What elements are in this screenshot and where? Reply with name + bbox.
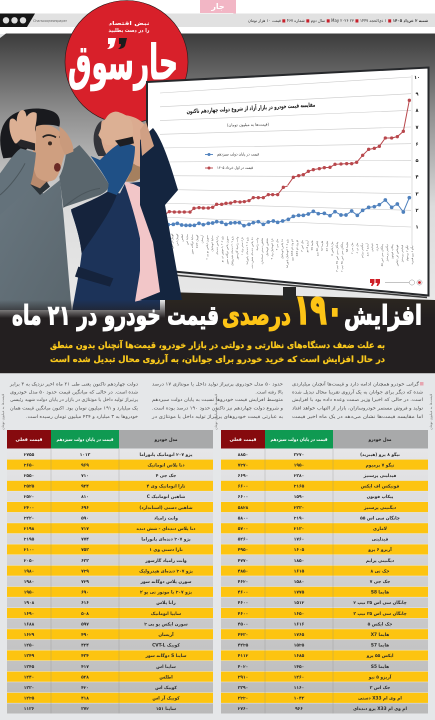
x axis car labels: جک جی ۴ [275, 238, 279, 250]
left table rows: جک جی ۴ [156, 473, 176, 479]
x axis car labels: کوییک اس [175, 233, 179, 246]
right table rows: ۲۳۸۰ [294, 474, 304, 479]
side caption middle: قیمت‌ها به میلیون تومان [214, 394, 218, 430]
article column 2 [151, 382, 284, 420]
x axis car labels: فیدلیتی [370, 243, 374, 252]
left table rows: ۷۷۴ [81, 538, 89, 543]
x axis car labels: دنا پلاس اتوماتیک [280, 238, 284, 259]
x axis car labels: ام وی ام X33 [295, 239, 300, 256]
monitor corner icons [370, 279, 422, 286]
x axis car labels: سورن پلاس دوگانه سوز [225, 236, 229, 265]
right table rows: ۱۶۱۶ [294, 622, 305, 627]
left table rows: ۴۱۷ [81, 665, 89, 670]
right table rows: ۲۱۶۵ [294, 485, 305, 490]
left table rows: ۷۱۰ [81, 474, 89, 479]
top pink tag [200, 0, 236, 15]
bench under monitor [165, 292, 435, 320]
left table rows: وانت زامیاد گازسوز [144, 558, 187, 564]
left table rows: ۲۱۹۵ [24, 538, 35, 543]
right table rows: ۱۶۵۰ [294, 612, 304, 617]
right table rows: ۱۰۴۳ [294, 697, 305, 702]
right table rows: ۵۷۰۰ [238, 527, 248, 532]
x axis car labels: هایما S8 [345, 242, 349, 252]
left table rows: ۲۰۵۰ [24, 559, 34, 564]
right table rows: ۳۲۷۰ [294, 453, 304, 458]
left table rows: ۱۰۱۳ [80, 453, 91, 458]
x axis car labels: دنا پلاس دنده‌ای شش دنده [250, 237, 254, 268]
left table rows: ۲۴۰۰ [24, 506, 34, 511]
left table rows: ساینا S دوگانه سوز [144, 653, 187, 659]
left table rows: ۷۲۹ [81, 569, 89, 574]
subheadline: در حال افزایش است که خرید خودرو برای جوانان، به آرزوی محال تبدیل شده است [50, 353, 386, 365]
left table rows: ۶۱۶ [81, 601, 89, 606]
right table rows: ۵۸۲۸ [238, 506, 249, 511]
article column 3: دولت چهاردهم تاکنون یعنی طی ۲۱ ماه اخیر نزدیک به ۳ برابر [9, 382, 138, 388]
left table rows: ۴۳۴ [81, 654, 89, 659]
right table rows: دیگنیتی پرستیژ [363, 505, 397, 511]
chart title: مقایسه قیمت خودرو در بازار آزاد از شروع دولت چهاردهم تاکنون [186, 101, 316, 115]
left table rows: آریسان [158, 632, 174, 638]
right table rows: ۹۶۶ [295, 707, 303, 712]
right table rows: ۱۵۸۰ [294, 580, 304, 585]
right table rows: ایکس ۵۵ پرو [366, 653, 394, 659]
x axis car labels: فونیکس اف ایکس [395, 244, 399, 266]
x axis car labels: لاماری [375, 243, 379, 251]
right table rows: ۶۶۰۰ [238, 485, 248, 490]
right table rows: ام وی ام X33 پرو دنده‌ای [353, 706, 407, 712]
left table rows: دنا پلاس اتوماتیک [147, 462, 185, 468]
date bar [0, 14, 435, 27]
left table rows: شاهین اتوماتیک C [147, 494, 185, 500]
left table rows: ۴۳۴ [81, 644, 89, 649]
left table rows [7, 449, 213, 714]
x axis car labels: جک ایکس ۵ [330, 241, 334, 256]
x axis car labels: وانت زامیاد گازسوز [235, 236, 239, 260]
y axis labels [414, 75, 420, 230]
logo wordmark: چارسوق [68, 35, 178, 91]
left table rows: ۵۳۸ [81, 675, 89, 680]
x axis car labels: آریسان [200, 235, 204, 243]
left table rows: ۷۱۷ [81, 527, 89, 532]
social badge [0, 14, 35, 27]
right table rows: ۴۸۵۰ [238, 569, 248, 574]
x axis car labels: سایپا اتوماتیک [210, 235, 214, 252]
right table rows: پیکاپ فوتون [367, 494, 394, 500]
y axis labels: ۱۰ [414, 75, 420, 81]
x axis car labels: رانا پلاس دنده‌ای [215, 235, 219, 255]
x axis car labels: شاهین دستی استاندارد [260, 237, 264, 265]
x axis car labels: هایما S7 [320, 240, 324, 251]
x axis car labels: پژو ۲۰۷ دنده‌ای هیدرولیک [230, 236, 234, 266]
x axis car labels: جک اس ۳ [300, 240, 304, 252]
x axis car labels: سورن ایکس یو پی ۲ [205, 235, 209, 259]
y axis labels: ۳ [415, 192, 419, 198]
article column 3: یک میلیارد و ۱۹۱ میلیون تومان بود. اکنون میانگین قیمت همان [10, 404, 139, 412]
left table header: مدل خودرو [154, 437, 178, 443]
article column 3 [9, 382, 139, 420]
left table rows: پژو ۲۰۷ اتوماتیک پانوراما [140, 452, 193, 458]
right table rows: ۷۲۷۰ [238, 463, 248, 468]
right table header: قیمت فعلی [230, 437, 256, 443]
y axis labels: ۴ [415, 174, 419, 180]
x axis car labels: چانگان سی اس ۳۵ تیپ ۲ [340, 242, 344, 272]
right table rows: ۴۵۰۰ [238, 622, 248, 627]
right table rows: ۵۳۶۰ [238, 538, 248, 543]
article column 1: گرانی خودرو همچنان ادامه دارد و قیمت‌ها آنچنان میلیاردی [292, 380, 420, 388]
left table rows: ۱۹۵۰ [24, 591, 34, 596]
left table rows: ۵۹۰ [81, 516, 89, 521]
left table rows: ۱۶۸۸ [24, 622, 35, 627]
right table rows: فیدلیتی پرستیژ [363, 474, 397, 479]
right table header [221, 430, 428, 448]
left table header [7, 430, 213, 448]
right table rows: ۳۹۱۰ [238, 675, 248, 680]
right table rows: ۴۹۵۰ [238, 548, 248, 553]
red line series [160, 100, 409, 214]
left table rows: سورن پلاس دوگانه سوز [140, 579, 191, 585]
right table rows: ۱۱۶۰ [294, 686, 304, 691]
right table rows: ۴۶۰۰ [238, 591, 248, 596]
x axis car labels: جک جی ۷ [350, 242, 354, 254]
left table rows: ۲۳۳۰ [24, 516, 34, 521]
article column 2: متوسط افزایش قیمت خودروها نسبت به پایان دولت سیزدهم [152, 398, 284, 403]
left table rows: ۱۳۵۰ [24, 644, 34, 649]
y axis labels: ۸ [415, 108, 419, 114]
x axis car labels: کوییک آر اس [170, 233, 174, 248]
article column 2: به عبارتی قیمت خودروهای پرتیراژ تولید داخل یا مونتاژی در [151, 415, 283, 420]
right table rows: ۱۷۶۰ [294, 538, 304, 543]
right table rows: فیدلیتی [372, 538, 388, 543]
right table rows: ام وی ام X33 دستی [358, 696, 402, 702]
right table rows: ۱۷۷۵ [294, 591, 305, 596]
headline: قیمت خودرو در ۲۱ ماه [12, 300, 219, 332]
table: left [7, 430, 213, 714]
right table rows: ۴۶۲۰ [238, 580, 248, 585]
x axis car labels: شاهین اتوماتیک [265, 238, 269, 256]
chart subtitle: (قیمت‌ها به میلیون تومان) [227, 122, 269, 127]
side caption right: قیمت‌ها به میلیون تومان [429, 394, 433, 430]
right table rows: ۱۶۸۵ [294, 654, 305, 659]
right table rows: ۴۳۲۵ [238, 644, 249, 649]
x axis car labels: دیگنیتی پرایم [360, 242, 364, 258]
left table rows: ۵۹۷ [81, 622, 89, 627]
x axis car labels: کوییک CVT [195, 234, 199, 248]
x axis car labels: چانگان سی اس ۳۵ تیپ ۳ [335, 241, 339, 272]
right table rows: ۸۸۵۰ [238, 453, 248, 458]
social handle: Charsooqnewspaper [33, 18, 67, 23]
right table rows: ۶۶۹۰ [238, 474, 248, 479]
left table header: قیمت فعلی [16, 437, 42, 443]
left table rows: ۱۹۰۸ [24, 601, 35, 606]
right table rows: ۱۵۹۰ [294, 495, 304, 500]
left table rows: ۹۶۹ [81, 463, 89, 468]
left table rows: ۶۹۰ [81, 591, 89, 596]
x axis car labels: آریزو ۶ پرو [365, 243, 369, 257]
blue line series [163, 198, 409, 226]
x axis car labels: ساینا ۱۵۱ [165, 232, 169, 244]
right table rows: تیگو ۸ پرو (هیبرید) [360, 452, 400, 458]
right table rows: ۱۸۵۰ [294, 559, 304, 564]
right table header: مدل خودرو [368, 437, 392, 443]
side caption left: قیمت‌ها به میلیون تومان [1, 394, 5, 430]
table: right [221, 430, 428, 714]
left table rows: ۸۱۰ [81, 495, 89, 500]
right table rows: ۲۱۹۰ [294, 516, 304, 521]
x axis car labels: ایکس ۵۵ پرو [315, 240, 319, 257]
right table rows: هایما X7 [371, 632, 389, 638]
y axis labels: ۶ [415, 142, 419, 148]
right table rows: چانگان سی اس ۳۵ تیپ ۲ [353, 600, 407, 606]
right table rows: ۱۷۶۵ [294, 633, 305, 638]
right table rows: ۴۱۱۲ [238, 654, 249, 659]
x axis car labels: تیگو ۷ پرمیوم [405, 245, 410, 261]
right table rows: فونیکس اف ایکس [361, 484, 399, 490]
left table rows: ۱۳۴۹ [24, 654, 35, 659]
logo quote marks [107, 38, 127, 49]
left table rows: ۱۳۴۵ [24, 665, 35, 670]
x axis car labels: اطلس [180, 234, 184, 242]
left table rows: سورن ایکس یو پی ۲ [144, 621, 188, 627]
right table rows: آریزو ۶ پرو [367, 547, 392, 553]
left table rows: ساینا اس [156, 665, 176, 670]
left table rows: ۱۹۸۰ [24, 569, 34, 574]
left table header: قیمت در پایان دولت سیزدهم [56, 437, 114, 443]
right table rows: هایما S7 [371, 643, 389, 649]
article column 2: بالا رفته است. [255, 390, 283, 396]
left table rows: ۲۵۵۰ [24, 474, 34, 479]
left table rows: ۲۵۲۰ [24, 495, 34, 500]
right table rows: تیگو ۷ پرمیوم [366, 462, 395, 468]
left table rows: ۵۰۸ [81, 612, 89, 617]
right table rows: هایما S5 [371, 664, 389, 670]
left table rows: ۱۹۸۰ [24, 580, 34, 585]
y axis labels: ۲ [415, 208, 419, 214]
right table rows: ۱۵۲۵ [294, 644, 305, 649]
x axis car labels: پژو ۲۰۷ دنده‌ای پانوراما [245, 237, 249, 264]
monitor with chart [147, 68, 428, 300]
left table rows: وانت زامیاد [154, 516, 178, 521]
x axis car labels: چانگان سی اس ۵۵ [380, 244, 384, 266]
right table rows: لاماری [373, 527, 387, 532]
left table rows: ۲۶۵۰ [24, 463, 34, 468]
x axis car labels: تارا دستی وی ۱ [240, 237, 244, 255]
left table rows: ۶۹۶ [81, 506, 89, 511]
right table rows: ۴۴۳۰ [238, 633, 248, 638]
headline: درصدی [222, 300, 291, 332]
photo: man in navy jacket [71, 112, 182, 310]
subheadline [50, 339, 386, 365]
legend [205, 152, 259, 170]
legend: قیمت در اول خرداد ۱۴۰۵ [217, 165, 253, 170]
left table rows: ۲۱۰۰ [24, 548, 34, 553]
y axis labels: ۵ [415, 158, 419, 164]
y axis labels: ۷ [415, 125, 419, 131]
right table header: قیمت در پایان دولت سیزدهم [270, 437, 328, 443]
right table rows: جک تی ۸ [370, 568, 390, 574]
x axis car labels: پژو ۲۰۷ اتوماتیک پانوراما [285, 239, 289, 268]
left table rows: ۴۹۰ [81, 633, 89, 638]
date line: شنبه ۲ خرداد ۱۴۰۵ ■ ۱ ذی‌الحجه ۱۴۴۷ ■ ۲۳ May ۲۰۲۶ ■ سال دوم ■ شماره ۴۶۷ ■ قیمت ۱۰ هزار تومان [248, 18, 428, 23]
x axis car labels: دیگنیتی پرستیژ [385, 243, 389, 262]
top pink tag: جار [210, 2, 225, 11]
right table rows [221, 449, 428, 714]
article column 2: و شروع دولت چهاردهم نیز تاکنون حدود ۱۹۰ درصد بوده است. [152, 406, 283, 412]
x axis car labels: آریزو ۵ نیو [305, 240, 309, 253]
masthead logo circle [65, 0, 188, 124]
left table rows: ۱۳۳۰ [24, 686, 34, 691]
article column 3: خودروها به ۳ میلیارد و ۴۲۴ میلیون تومان رسیده است. [26, 414, 138, 420]
right table rows: جک جی ۷ [370, 579, 390, 585]
right table rows: ۱۶۱۵ [294, 569, 305, 574]
headline: ۱۹۰ [294, 285, 343, 334]
left table rows: کوییک CVT-L [152, 643, 180, 649]
right table rows: ۲۷۶۰ [238, 707, 248, 712]
right table rows: جک ایکس ۵ [368, 621, 392, 627]
left table rows: ساینا ۱۵۱ [156, 707, 176, 712]
tagline: نبض اقتصاد [108, 21, 150, 27]
headline band [0, 285, 435, 374]
right table rows: ۱۹۵۰ [294, 463, 304, 468]
monitor frame [147, 68, 428, 296]
x axis car labels: جک تی ۸ [355, 242, 359, 253]
photo: man in gray shirt [0, 109, 109, 310]
right table rows: آریزو ۵ نیو [368, 674, 392, 680]
right table rows: ۴۶۰۰ [238, 601, 248, 606]
masthead logo circle: را در دست بطلبید [108, 28, 150, 34]
left table rows: پژو ۲۰۷ با موتور تی یو ۳ [140, 591, 192, 596]
left table rows: ۲۱۹۸ [24, 527, 35, 532]
subheadline: به علت ضعف دستگاه‌های نظارتی و دولتی در بازار خودرو، قیمت‌ها آنچنان بدون منطق [50, 339, 385, 351]
left table rows: ۱۱۳۶ [24, 707, 35, 712]
left table rows: پژو ۲۰۷ دنده‌ای پانوراما [141, 538, 191, 543]
left table rows: ۷۵۳ [81, 548, 89, 553]
right table rows: ۱۵۱۲ [294, 601, 305, 606]
right table rows: ۶۶۰۰ [238, 495, 248, 500]
left table rows: ۳۷۲ [81, 707, 89, 712]
left table rows: کوییک اس [155, 685, 177, 691]
article column 2: حدود ۵۰ مدل خودروی پرتیراژ تولید داخل یا مونتاژی ۱۷ درصد [152, 382, 283, 388]
right table rows: ۳۲۲۰ [238, 697, 248, 702]
right table rows: چانگان سی اس ۵۵ [360, 515, 400, 521]
right table rows: ۲۳۳۰ [294, 506, 304, 511]
y axis labels: ۱ [415, 224, 419, 230]
left table rows: تارا دستی وی ۱ [149, 548, 183, 553]
x axis car labels: پیکاپ فوتون [390, 244, 394, 259]
x axis car labels: فیدلیتی پرستیژ [400, 244, 404, 263]
left table rows: ۹۳۴ [81, 485, 89, 490]
left table rows: تارا اتوماتیک وی ۴ [147, 484, 186, 490]
x axis car labels: وانت زامیاد [255, 237, 259, 251]
headline [12, 285, 422, 334]
left table rows: شاهین دستی (استاندارد) [139, 505, 193, 511]
left table rows: ۱۳۴۰ [24, 675, 34, 680]
left table rows: رانا پلاس [156, 601, 176, 606]
left table rows: ۲۵۳۵ [24, 485, 35, 490]
x axis car labels: هایما X7 [325, 241, 329, 251]
photo background [0, 34, 435, 320]
right table rows: ۵۸۰۰ [238, 516, 248, 521]
left table rows: اطلس [159, 675, 173, 680]
right table rows: دیگنیتی پرایم [366, 558, 395, 564]
monitor stand [283, 287, 296, 300]
y axis labels: ۹ [415, 92, 419, 98]
right table rows: ۴۷۷۰ [238, 559, 248, 564]
right table rows: ۱۳۶۰ [294, 675, 304, 680]
article column 1: است. در حالی که اخیرا وزیر صمت وعده داده بود با افزایش [292, 397, 423, 403]
x axis car labels: تیگو ۸ پرو هیبرید [410, 245, 414, 265]
left table rows: ۷۲۹ [81, 580, 89, 585]
x axis car labels: ام وی ام X33 پرو [290, 239, 295, 262]
x axis car labels: ساینا دوگانه سوز [190, 234, 194, 255]
right table rows: ۱۶۰۵ [294, 548, 305, 553]
left table rows: ۴۲۰ [81, 686, 89, 691]
left table rows: پژو ۲۰۷ دنده‌ای هیدرولیک [139, 568, 193, 574]
left table rows: ۱۶۹۰ [24, 612, 34, 617]
right table rows: جک اس ۳ [370, 685, 390, 691]
right table rows: ۱۴۵۰ [294, 665, 304, 670]
left table rows: دنا پلاس دنده‌ای - شش دنده [137, 527, 196, 532]
left table rows: ۴۱۸ [81, 697, 89, 702]
x axis car labels: ساینا اس [185, 234, 189, 245]
article column 3: پرتیراژ تولید داخل یا مونتاژی در بازار در پایان دولت شهید رئیسی [10, 398, 139, 403]
right table rows: ۳۳۹۰ [238, 686, 248, 691]
left table rows: سایپا اتوماتیک [151, 611, 181, 617]
article column 1 [292, 380, 424, 420]
x axis car labels: پژو ۲۰۷ با موتور تی یو [220, 236, 224, 263]
left table rows: کوییک آر اس [152, 696, 180, 702]
article column 1: تولید و فروش مستمر خودروسازان، بازار از التهاب خواهد افتاد [292, 406, 424, 412]
right table rows: چانگان سی اس ۳۵ تیپ ۳ [353, 611, 407, 617]
x axis car labels [165, 232, 414, 272]
left table rows: ۶۳۳ [81, 559, 89, 564]
legend: قیمت در پایان دولت سیزدهم [217, 152, 259, 156]
right table rows: ۲۱۳۰ [294, 527, 304, 532]
left table rows: ۱۶۲۹ [24, 633, 35, 638]
article column 1: اما مقایسه قیمت‌ها نشان می‌دهد در یک ماه اخیر قیمت [292, 414, 423, 420]
right table rows: ۴۶۰۰ [238, 612, 248, 617]
article column 1: شده که دیگر برای جوانان به یک آرزوی تقریبا محال تبدیل شده [292, 388, 423, 396]
left table rows: ۱۳۲۵ [24, 697, 35, 702]
x axis car labels: تارا اتوماتیک وی ۴ [270, 238, 274, 259]
article column 3: شده است. در حالی که میانگین قیمت حدود ۵۰ مدل خودروی [10, 388, 138, 396]
right table rows: ۴۰۲۰ [238, 665, 248, 670]
left table rows: ۲۷۵۵ [24, 453, 35, 458]
x axis car labels: هایما S5 [310, 240, 314, 250]
right table rows: هایما S8 [371, 590, 389, 596]
